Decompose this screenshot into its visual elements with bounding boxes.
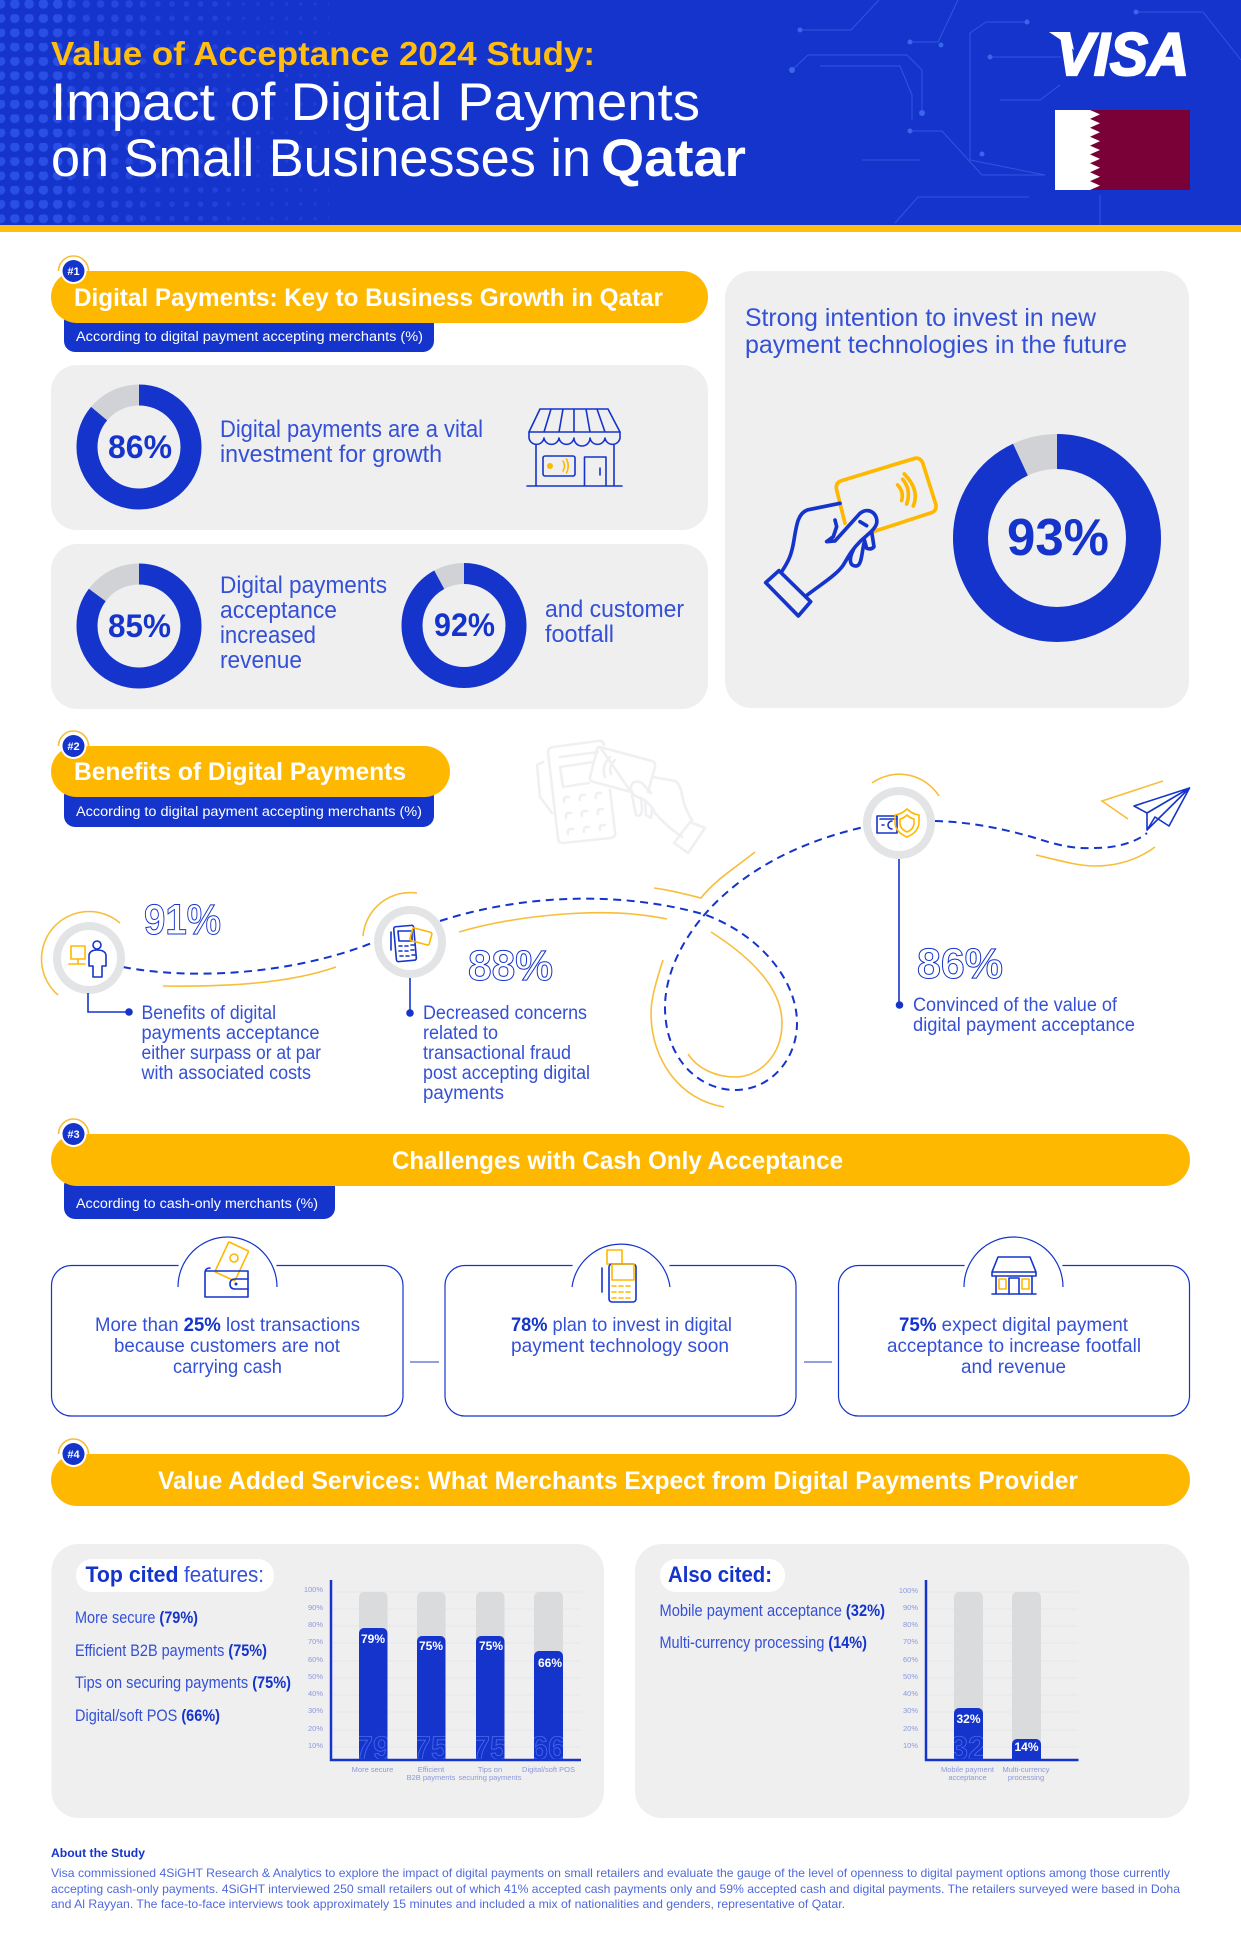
donut 92%: 92%	[434, 607, 495, 643]
feature list: Digital/soft POS (66%)	[75, 1707, 220, 1725]
node: person and computer	[53, 922, 125, 994]
feature list: Tips on securing payments (75%)	[75, 1674, 291, 1692]
donut 85%	[87, 574, 191, 678]
connector	[410, 1361, 439, 1363]
donut 93%	[970, 452, 1144, 624]
heading pill: Challenges with Cash Only Acceptance	[392, 1147, 843, 1175]
title	[51, 35, 746, 188]
bar chart: top cited: 10%	[308, 1741, 323, 1750]
connector	[896, 859, 903, 1009]
section 3 heading	[51, 1119, 1190, 1219]
label pill	[660, 1559, 785, 1592]
bar chart: top cited: 30%	[308, 1706, 323, 1715]
bar chart: top cited: Digital/soft POS	[522, 1765, 575, 1774]
feature list	[660, 1602, 885, 1652]
text: decreased fraud concerns: transactional fraud	[423, 1043, 571, 1064]
bar chart: also cited: 100%	[899, 1586, 918, 1595]
text: increased revenue: increased	[220, 622, 316, 649]
icon: small store	[992, 1257, 1036, 1294]
text: convinced of value: digital payment acceptance	[913, 1015, 1135, 1036]
journey path: dashed route	[123, 821, 1147, 1090]
bar chart: also cited: 70%	[903, 1637, 918, 1646]
bar: mobile 32%: 32	[950, 1730, 986, 1766]
donut 85%: 85%	[108, 608, 171, 644]
bar chart: top cited: More secure	[352, 1765, 393, 1774]
bar chart: top cited: 80%	[308, 1620, 323, 1629]
label pill: Top cited	[86, 1562, 178, 1587]
icon: store	[527, 409, 622, 486]
text: strong intention: payment technologies in the future	[745, 331, 1127, 359]
bar chart: also cited: 20%	[903, 1724, 918, 1733]
feature list: Multi-currency processing (14%)	[660, 1634, 867, 1652]
sub-heading pill	[64, 310, 434, 352]
badge #3	[58, 1119, 88, 1147]
bar chart: top cited: 20%	[308, 1724, 323, 1733]
heading pill	[51, 1134, 1190, 1186]
badge #4	[58, 1439, 88, 1467]
bar: mobile 32%	[954, 1592, 983, 1759]
text: increased revenue: revenue	[220, 647, 302, 674]
section 1 heading	[51, 256, 708, 352]
text: benefits surpass costs: either surpass or at par	[142, 1043, 322, 1064]
text: 78% plan to invest in digital	[511, 1314, 732, 1336]
text: strong intention	[745, 304, 1127, 359]
bar: B2B 75%	[417, 1592, 446, 1759]
donut 93%: 93%	[1007, 509, 1109, 567]
bar: multi-currency 14%	[1012, 1592, 1041, 1760]
text: benefits surpass costs: payments acceptance	[142, 1023, 320, 1044]
bar chart: top cited: 90%	[308, 1603, 323, 1612]
donut 86%: 86%	[108, 429, 172, 465]
connector	[88, 993, 133, 1016]
text: because customers are not	[114, 1335, 341, 1357]
node: POS terminal with card	[374, 906, 446, 978]
text: decreased fraud concerns	[423, 1003, 590, 1104]
text: customer footfall: and customer	[545, 596, 684, 623]
text: vital investment	[220, 416, 483, 468]
text: carrying cash	[173, 1356, 282, 1378]
about the study: accepting cash-only payments. 4SiGHT interviewed 250 small retailers out of which 41% accepted cash payments only and 59% accepted cash and digital payments. The retailers surveyed were based in Doha	[51, 1882, 1180, 1896]
sub-heading pill: According to digital payment accepting merchants (%)	[76, 329, 423, 344]
title: Qatar	[601, 129, 746, 188]
text: decreased fraud concerns: post accepting digital	[423, 1063, 590, 1084]
bar chart: also cited: acceptance	[948, 1773, 987, 1782]
title: Value of Acceptance 2024 Study:	[51, 35, 595, 72]
bar chart: top cited: Efficient	[418, 1765, 445, 1774]
icon: hand holding contactless card	[766, 458, 936, 616]
donut 86%	[87, 395, 191, 499]
qatar flag	[1055, 110, 1190, 190]
bar chart: top cited	[304, 1580, 581, 1782]
stat 91%: 91%	[144, 896, 221, 944]
bar chart: top cited: securing payments	[459, 1773, 522, 1782]
bar chart: also cited: processing	[1008, 1773, 1044, 1782]
bar: digital POS 66%: 66%	[538, 1656, 562, 1670]
heading pill	[51, 1454, 1190, 1506]
bar: B2B 75%: 75%	[419, 1639, 443, 1653]
icon: wallet with bill	[205, 1242, 249, 1297]
panel: top cited features	[52, 1544, 604, 1818]
bar: tips 75%	[476, 1592, 504, 1759]
text: acceptance to increase footfall	[887, 1335, 1141, 1357]
card: expect footfall and revenue	[838, 1237, 1190, 1416]
icon: paper plane	[1134, 788, 1190, 830]
donut 92%	[412, 574, 516, 678]
text	[887, 1314, 1141, 1378]
text: customer footfall: footfall	[545, 621, 614, 648]
badge #4: #4	[67, 1449, 80, 1461]
about the study: and Al Rayyan. The face-to-face interviews took approximately 15 minutes and included a mix of nationalities and genders, representative of Qatar.	[51, 1897, 845, 1911]
bar chart: top cited: 70%	[308, 1637, 323, 1646]
text: benefits surpass costs: with associated costs	[141, 1063, 311, 1084]
text: customer footfall	[545, 596, 684, 648]
journey path: yellow accents	[41, 774, 1163, 1107]
bar chart: also cited: 40%	[903, 1689, 918, 1698]
section 4 heading	[51, 1439, 1190, 1506]
text	[95, 1314, 360, 1378]
heading pill: Value Added Services: What Merchants Expect from Digital Payments Provider	[158, 1467, 1078, 1495]
text: decreased fraud concerns: related to	[423, 1023, 498, 1044]
about the study	[51, 1848, 1180, 1911]
about the study: Visa commissioned 4SiGHT Research & Analytics to explore the impact of digital payments on small retailers and evaluate the gauge of the level of openness to digital payment options among those currently	[51, 1866, 1170, 1880]
text: benefits surpass costs: Benefits of digital	[142, 1003, 276, 1024]
sub-heading pill	[64, 1175, 335, 1219]
feature list	[75, 1609, 291, 1725]
bar chart: also cited: 30%	[903, 1706, 918, 1715]
section 2 heading	[51, 731, 450, 827]
label pill: features:	[184, 1562, 264, 1587]
bar chart: also cited: 10%	[903, 1741, 918, 1750]
text: vital investment: Digital payments are a vital	[220, 416, 483, 443]
title: on Small Businesses in	[51, 129, 591, 188]
text: increased revenue: Digital payments	[220, 572, 387, 599]
bar chart: also cited: 90%	[903, 1603, 918, 1612]
benefit 91%	[53, 896, 322, 1084]
bar: multi-currency 14%: 14%	[1014, 1740, 1039, 1754]
feature list: Efficient B2B payments (75%)	[75, 1642, 267, 1660]
feature list: More secure (79%)	[75, 1609, 198, 1627]
text: convinced of value	[913, 995, 1135, 1036]
badge #1: #1	[67, 266, 80, 278]
bar chart: also cited: 80%	[903, 1620, 918, 1629]
heading pill: Benefits of Digital Payments	[74, 758, 406, 786]
visa logo: VISA	[1056, 21, 1189, 88]
sub-heading pill	[64, 785, 434, 827]
label pill	[76, 1559, 274, 1592]
bar chart: top cited: Tips on	[478, 1765, 502, 1774]
bar: more secure 79%	[359, 1592, 388, 1759]
panel: 86% vital investment	[51, 365, 708, 530]
badge #3: #3	[67, 1129, 80, 1141]
bar chart: top cited: B2B payments	[407, 1773, 456, 1782]
panel: 85% revenue and 92% footfall	[51, 544, 708, 709]
bar: mobile 32%: 32%	[956, 1712, 981, 1726]
text	[511, 1314, 732, 1357]
bar chart: also cited: Mobile payment	[941, 1765, 995, 1774]
heading pill: Digital Payments: Key to Business Growth in Qatar	[74, 284, 663, 312]
text: More than 25% lost transactions	[95, 1314, 360, 1336]
bar: more secure 79%: 79%	[361, 1632, 385, 1646]
sub-heading pill: According to cash-only merchants (%)	[76, 1196, 318, 1211]
bar: tips 75%: 75%	[479, 1639, 503, 1653]
bar chart: top cited: 60%	[308, 1655, 323, 1664]
header accent stripe	[0, 225, 1241, 232]
bar chart: top cited: 100%	[304, 1585, 323, 1594]
text: payment technology soon	[511, 1335, 729, 1357]
sub-heading pill: According to digital payment accepting merchants (%)	[76, 804, 422, 819]
title: Impact of Digital Payments	[51, 73, 700, 132]
heading pill	[51, 746, 450, 797]
bar chart: also cited: 50%	[903, 1672, 918, 1681]
text: strong intention: Strong intention to invest in new	[745, 304, 1097, 332]
label pill: Also cited:	[668, 1562, 772, 1587]
text: 75% expect digital payment	[899, 1314, 1129, 1336]
heading pill	[51, 271, 708, 323]
text: convinced of value: Convinced of the value of	[913, 995, 1118, 1016]
text: vital investment: investment for growth	[220, 441, 442, 468]
bar chart: also cited: 60%	[903, 1655, 918, 1664]
bar chart: also cited: Multi-currency	[1002, 1765, 1050, 1774]
bar chart: top cited: 50%	[308, 1672, 323, 1681]
benefit 88%	[374, 906, 590, 1104]
badge #2: #2	[67, 741, 80, 753]
text: increased revenue	[220, 572, 387, 674]
card: plan to invest	[445, 1244, 796, 1416]
badge #2	[58, 731, 88, 759]
bar: more secure 79%: 79	[355, 1730, 391, 1766]
panel: also cited	[635, 1544, 1190, 1818]
icon: POS terminal	[602, 1250, 636, 1302]
bar: digital POS 66%	[534, 1592, 563, 1759]
stat 86%: 86%	[917, 940, 1003, 988]
benefit 86%	[863, 787, 1135, 1036]
bar: digital POS 66%: 66	[530, 1730, 566, 1766]
node: cash and shield	[863, 787, 935, 859]
connector	[406, 978, 414, 1017]
card: lost transactions	[52, 1237, 403, 1416]
feature list: Mobile payment acceptance (32%)	[660, 1602, 885, 1620]
bar: B2B 75%: 75	[413, 1730, 449, 1766]
text: increased revenue: acceptance	[220, 597, 337, 624]
text: and revenue	[961, 1356, 1066, 1378]
connector	[804, 1361, 832, 1363]
bar chart: top cited: 40%	[308, 1689, 323, 1698]
bar: tips 75%: 75	[472, 1730, 508, 1766]
text: benefits surpass costs	[141, 1003, 322, 1084]
watermark: POS and hand	[537, 741, 705, 853]
about the study: About the Study	[51, 1848, 146, 1860]
text: decreased fraud concerns: Decreased concerns	[423, 1003, 587, 1024]
text: decreased fraud concerns: payments	[423, 1083, 504, 1104]
badge #1	[58, 256, 88, 284]
stat 88%: 88%	[468, 942, 553, 990]
bar chart: also cited	[899, 1580, 1078, 1782]
panel: 93% intention to invest	[725, 271, 1189, 708]
header banner	[0, 0, 1241, 226]
